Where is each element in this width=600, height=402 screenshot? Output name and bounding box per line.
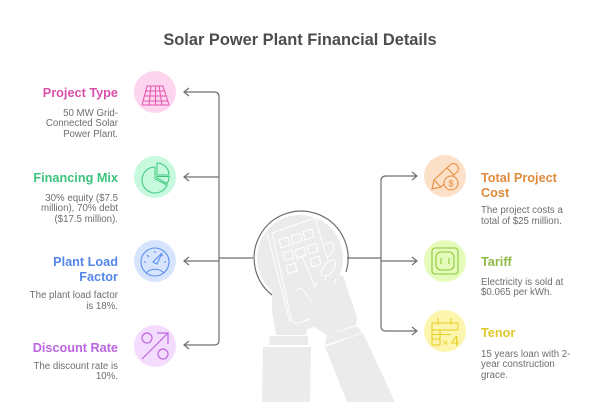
text: discount rate: Discount Rate	[33, 341, 118, 355]
icon: pencil and coin	[424, 155, 466, 197]
connectors: right	[347, 172, 417, 335]
text: tenor: 15 years loan with 2-	[481, 348, 570, 360]
connectors: left	[184, 88, 253, 349]
text: project type: Power Plant.	[63, 129, 118, 140]
text: tenor: year construction	[481, 359, 555, 370]
text: financing mix: million), 70% debt	[41, 203, 118, 214]
text: discount rate	[33, 341, 118, 382]
text: tariff: $0.065 per kWh.	[481, 287, 552, 298]
text: project type	[43, 86, 118, 140]
icon: calendar times four	[424, 310, 466, 352]
icon: calendar times four: 4	[451, 333, 459, 350]
text: tariff	[481, 255, 564, 298]
text: financing mix: 30% equity ($7.5	[45, 192, 118, 204]
text: total project cost: Cost	[481, 186, 509, 200]
text: plant load factor	[30, 255, 118, 312]
text: discount rate: The discount rate is	[33, 360, 118, 372]
icon: calendar times four: ×	[443, 338, 449, 349]
central hands illustration	[254, 211, 395, 402]
text: financing mix	[33, 171, 118, 225]
text: plant load factor: is 18%.	[86, 301, 118, 312]
text: project type: Connected Solar	[46, 118, 118, 129]
text: financing mix: Financing Mix	[33, 171, 118, 185]
text: plant load factor: Factor	[79, 270, 118, 284]
text: tenor: grace.	[481, 370, 508, 381]
icon: pie chart	[134, 156, 176, 198]
text: tariff: Tariff	[481, 255, 512, 269]
icon: percent arrow	[134, 325, 176, 367]
icon: solar panel	[134, 71, 176, 113]
text: project type: Project Type	[43, 86, 118, 100]
text: plant load factor: Plant Load	[53, 255, 118, 269]
text: discount rate: 10%.	[96, 371, 118, 382]
icon: pencil and coin: $	[448, 178, 454, 188]
text: total project cost: The project costs a	[481, 205, 563, 216]
icon: gauge	[134, 240, 176, 282]
text: tenor: Tenor	[481, 326, 515, 340]
icon: power outlet	[424, 240, 466, 282]
title: Solar Power Plant Financial Details	[163, 31, 437, 49]
text: total project cost: total of $25 million.	[481, 216, 562, 227]
text: tenor	[481, 326, 570, 381]
text: tariff: Electricity is sold at	[481, 276, 563, 288]
text: total project cost: Total Project	[481, 171, 557, 185]
text: financing mix: ($17.5 million).	[54, 214, 118, 225]
text: total project cost	[481, 171, 563, 227]
text: project type: 50 MW Grid-	[63, 108, 118, 118]
text: plant load factor: The plant load factor	[30, 290, 118, 301]
